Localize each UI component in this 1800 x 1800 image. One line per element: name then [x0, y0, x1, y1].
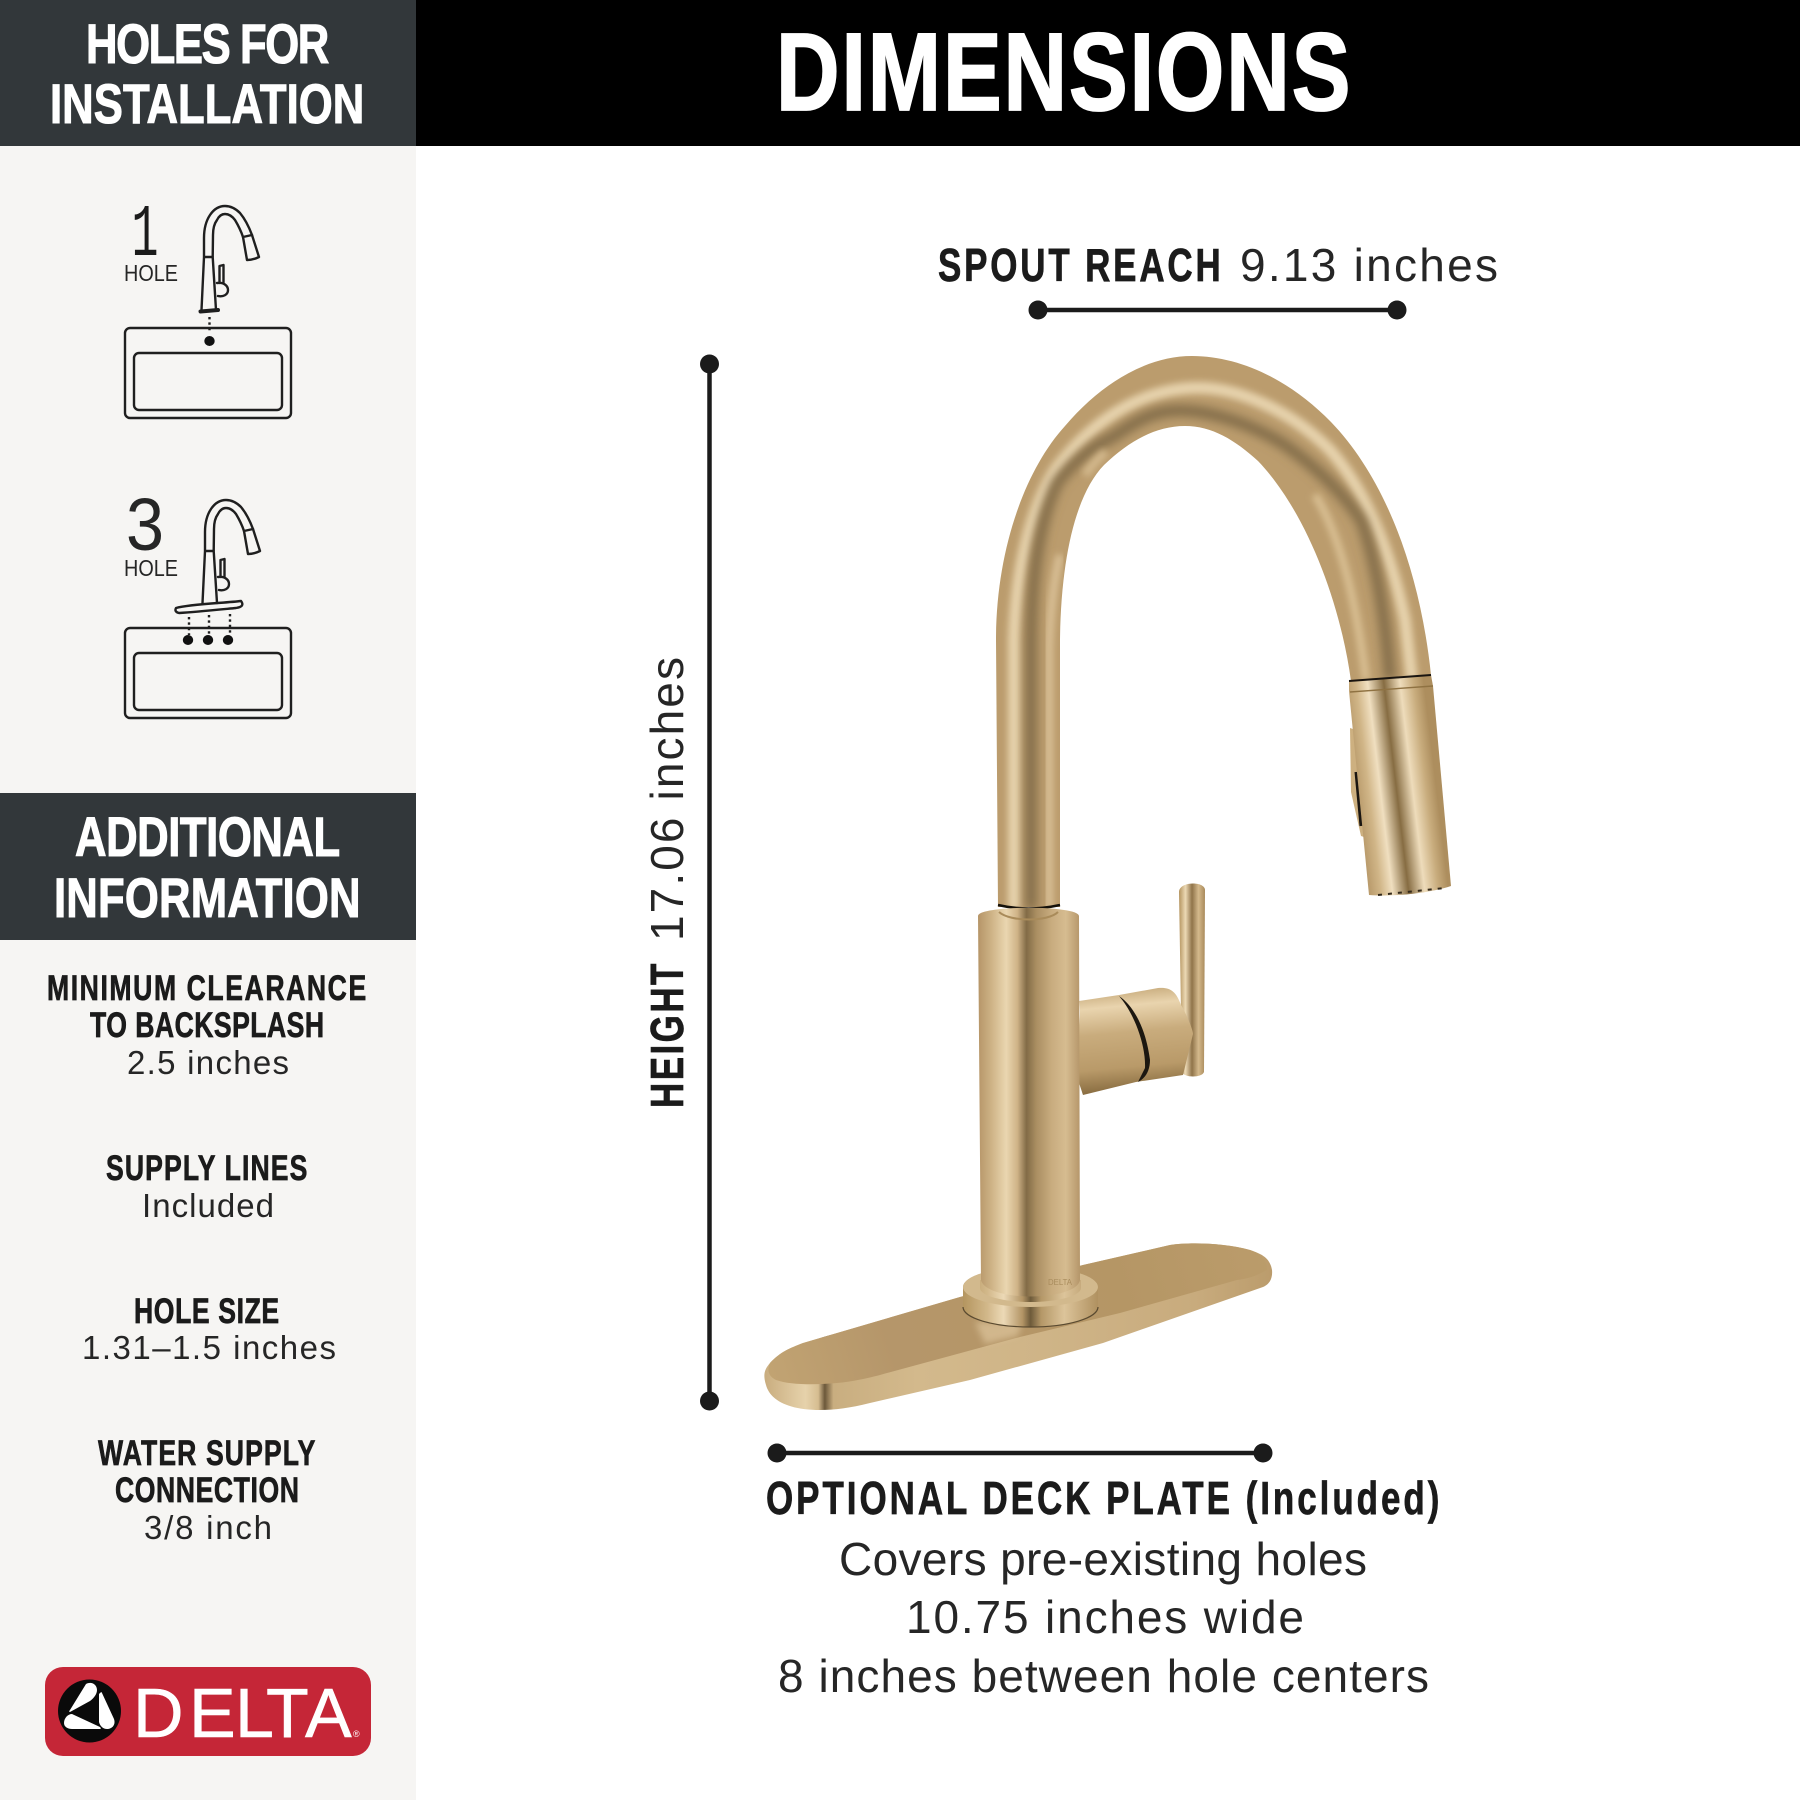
base column: [963, 908, 1098, 1327]
logo: Delta: ®: [353, 1729, 360, 1739]
arrow: spout reach dimension line: [1028, 300, 1406, 320]
text block: hole size: 1.31–1.5 inches: [82, 1329, 336, 1366]
text block: minimum clearance: 2.5 inches: [127, 1044, 289, 1081]
deck plate: [764, 1243, 1272, 1410]
title bar: dimensions: [416, 0, 1800, 146]
panel: left sidebar: [0, 0, 416, 1800]
title bar: dimensions: DIMENSIONS: [776, 12, 1350, 134]
spout: [996, 356, 1431, 908]
text block: hole size: [82, 1291, 336, 1366]
logo: Delta: DELTA: [133, 1674, 352, 1752]
arrow: deck plate dimension line: [768, 1444, 1272, 1462]
heading: additional information: INFORMATION: [54, 867, 361, 929]
icon: one hole installation: 1: [132, 194, 158, 278]
text block: water supply connection: [98, 1433, 316, 1546]
arrow: height dimension line: [700, 354, 719, 1410]
logo: Delta: [45, 1667, 371, 1756]
label: spout reach: [938, 239, 1498, 291]
text block: supply lines: Included: [142, 1187, 274, 1224]
label: height: [641, 657, 693, 1108]
illustration: gold faucet: [764, 340, 1451, 1410]
text block: supply lines: SUPPLY LINES: [106, 1148, 307, 1188]
handle: [1074, 883, 1205, 1095]
icon: three hole installation: 3: [126, 483, 164, 566]
icon: three hole installation: [124, 483, 291, 718]
text block: optional deck plate: Covers pre-existing holes: [839, 1533, 1367, 1585]
text block: minimum clearance: MINIMUM CLEARANCE: [47, 968, 366, 1008]
text block: water supply connection: CONNECTION: [115, 1470, 299, 1510]
text block: water supply connection: 3/8 inch: [144, 1509, 272, 1546]
text block: optional deck plate: OPTIONAL DECK PLATE (Included): [766, 1472, 1439, 1524]
text block: hole size: HOLE SIZE: [134, 1291, 279, 1331]
text block: minimum clearance: TO BACKSPLASH: [90, 1005, 324, 1045]
icon: one hole installation: HOLE: [124, 260, 178, 286]
label: height: HEIGHT: [641, 964, 693, 1108]
heading: holes for installation: [0, 0, 416, 146]
label: spout reach: SPOUT REACH: [938, 239, 1221, 291]
heading: additional information: ADDITIONAL: [75, 806, 340, 868]
text block: supply lines: [106, 1148, 307, 1224]
heading: holes for installation: INSTALLATION: [50, 73, 364, 135]
icon: one hole installation: [124, 194, 291, 418]
heading: additional information: [0, 793, 416, 940]
heading: holes for installation: HOLES FOR: [86, 13, 329, 75]
pull-down spray head: [1349, 675, 1451, 896]
text block: optional deck plate: 10.75 inches wide: [906, 1591, 1304, 1643]
text block: optional deck plate: 8 inches between hole centers: [778, 1650, 1429, 1702]
label: spout reach: 9.13 inches: [1240, 239, 1498, 291]
text block: water supply connection: WATER SUPPLY: [98, 1433, 316, 1473]
base column: DELTA: [1048, 1278, 1073, 1287]
icon: three hole installation: HOLE: [124, 555, 178, 581]
text block: minimum clearance: [47, 968, 366, 1081]
label: height: 17.06 inches: [641, 657, 693, 941]
text block: optional deck plate: [766, 1472, 1439, 1702]
